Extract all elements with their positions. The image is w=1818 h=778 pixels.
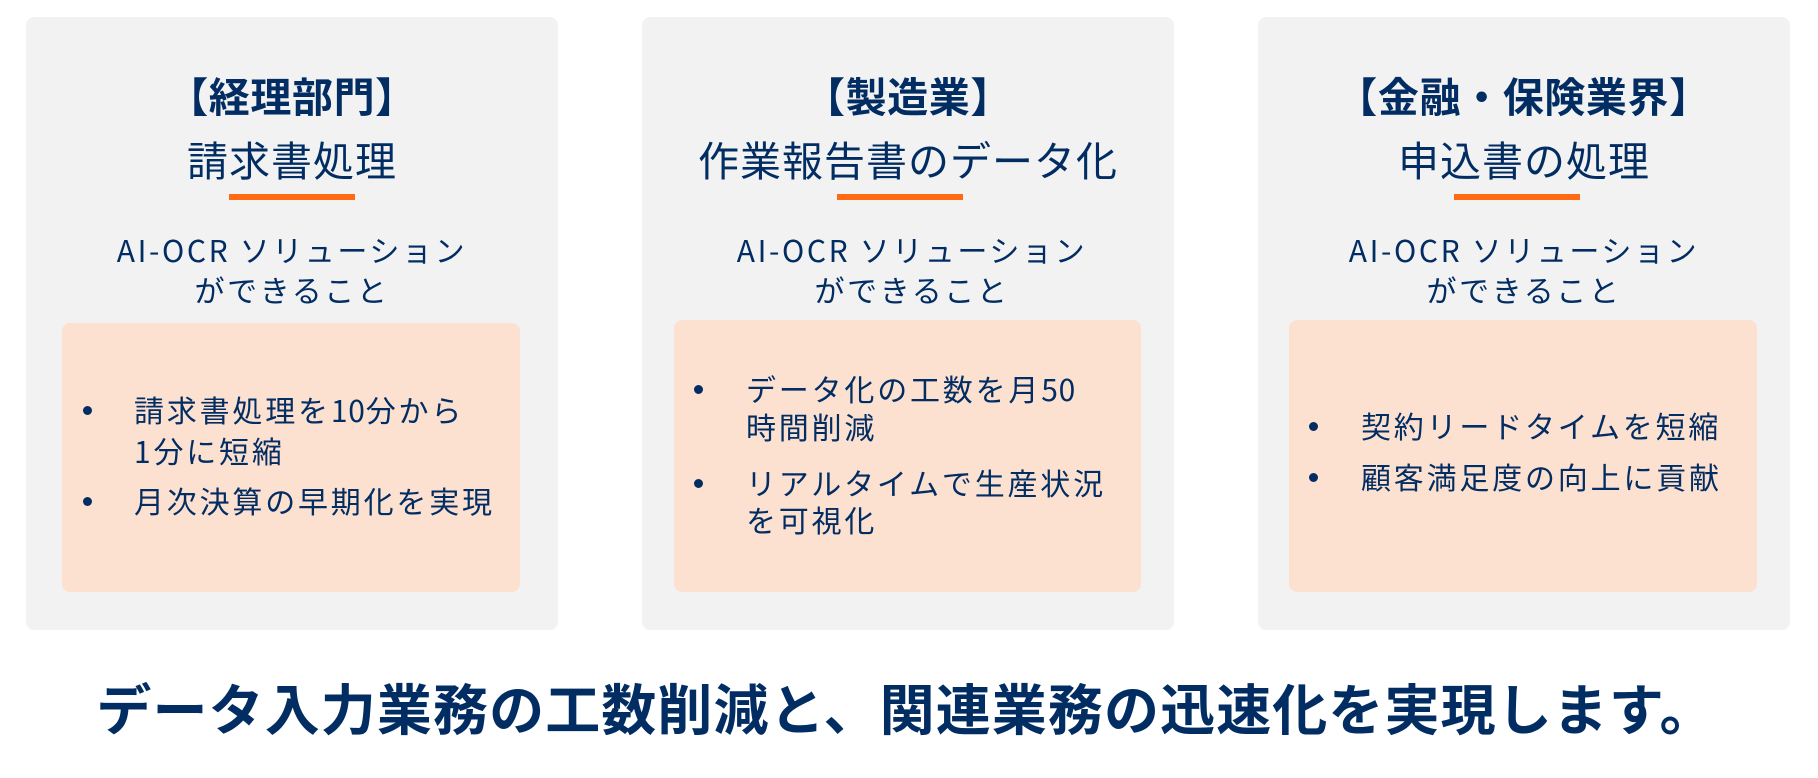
bullet text: 顧客満足度の向上に貢献 (1361, 454, 1722, 498)
bullet list: panel 3 (1309, 403, 1722, 498)
bullet text: 時間削減 (746, 404, 877, 448)
caption: panel 1: ができること (194, 267, 390, 311)
accent bar: panel 3 (1454, 194, 1580, 200)
bullet list: panel 1 (83, 387, 495, 522)
callout box: panel 1 (62, 323, 520, 592)
bullet dot (83, 406, 92, 415)
accent bar: panel 2 (837, 194, 963, 200)
bullet text: リアルタイムで生産状況 (746, 460, 1106, 504)
caption: panel 1: AI-OCR ソリューション (117, 227, 467, 271)
bullet dot (1309, 473, 1318, 482)
bullet dot (83, 497, 92, 506)
caption: panel 1 (116, 227, 467, 311)
panel: accounting department (26, 17, 558, 630)
bullet dot (694, 385, 703, 394)
bullet dot (694, 479, 703, 488)
caption: panel 2: ができること (814, 267, 1010, 311)
caption: panel 2 (736, 227, 1087, 311)
bullet text: を可視化 (746, 497, 877, 541)
bullet text: 月次決算の早期化を実現 (134, 478, 495, 522)
heading: accounting department: 【経理部門】 (167, 64, 417, 124)
heading: manufacturing: 【製造業】 (804, 64, 1012, 124)
subtitle: application processing: 申込書の処理 (1398, 128, 1650, 188)
caption: panel 3: AI-OCR ソリューション (1349, 227, 1699, 271)
accent bar: panel 1 (229, 194, 355, 200)
bullet text: 契約リードタイムを短縮 (1361, 403, 1721, 447)
heading: finance and insurance: 【金融・保険業界】 (1336, 64, 1711, 124)
callout box: panel 2 (674, 320, 1141, 592)
subtitle: invoice processing: 請求書処理 (187, 128, 397, 188)
panel: manufacturing (642, 17, 1174, 630)
callout box: panel 3 (1289, 320, 1757, 592)
subtitle: work report digitization: 作業報告書のデータ化 (698, 128, 1118, 188)
bullet text: 請求書処理を10分から (134, 387, 464, 431)
panel: finance and insurance (1258, 17, 1790, 630)
caption: panel 3 (1348, 227, 1699, 311)
bullet text: 1分に短縮 (134, 428, 285, 472)
headline message: データ入力業務の工数削減と、関連業務の迅速化を実現します。 (96, 666, 1716, 746)
bullet list: panel 2 (694, 366, 1106, 541)
caption: panel 3: ができること (1426, 267, 1622, 311)
bullet text: データ化の工数を月50 (746, 366, 1076, 410)
bullet dot (1309, 422, 1318, 431)
caption: panel 2: AI-OCR ソリューション (737, 227, 1087, 271)
